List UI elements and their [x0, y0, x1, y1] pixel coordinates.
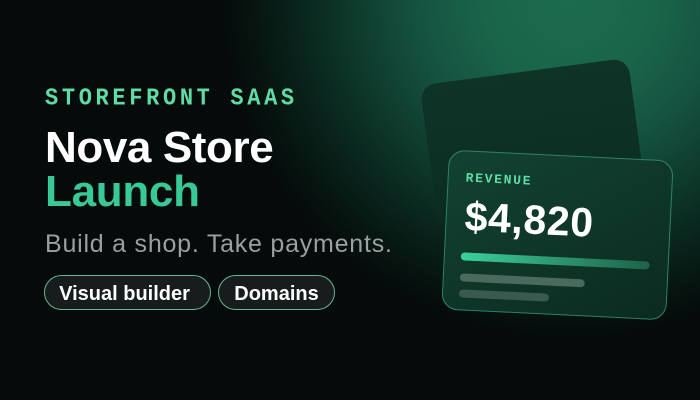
- pill: Domains: Domains: [234, 283, 319, 305]
- revenue label: REVENUE: [465, 170, 532, 189]
- tagline: Build a shop. Take payments.: [45, 230, 393, 258]
- progress bar: [461, 252, 650, 270]
- pill: Domains: [218, 275, 335, 310]
- placeholder line short: [459, 289, 549, 302]
- title line: Launch: Launch: [45, 167, 200, 216]
- pill: Visual builder: [44, 275, 211, 310]
- placeholder line long: [460, 273, 585, 287]
- revenue card: [441, 150, 674, 320]
- revenue amount: $4,820: [464, 193, 595, 246]
- pill: Visual builder: Visual builder: [59, 283, 190, 305]
- title line: Nova Store: Nova Store: [45, 123, 273, 172]
- back card: [420, 58, 646, 226]
- eyebrow label: STOREFRONT SAAS: [45, 85, 298, 112]
